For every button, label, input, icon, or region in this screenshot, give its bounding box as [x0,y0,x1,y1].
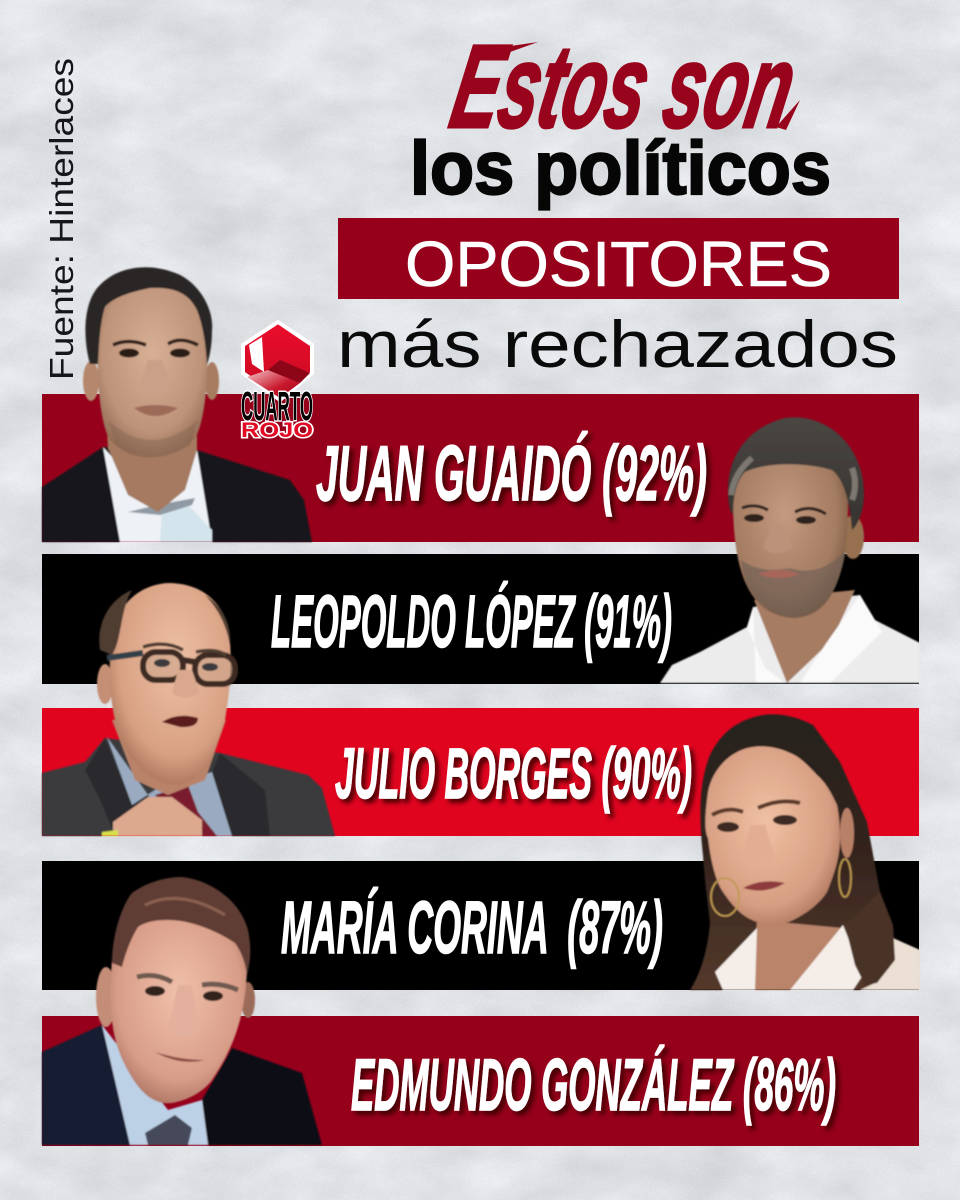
bar 5: Edmundo González [42,1016,919,1146]
portrait: Leopoldo López [660,417,920,683]
heading line: los políticos: los políticos [410,126,831,210]
bar 1: Juan Guaidó [42,394,919,542]
portrait: Juan Guaidó [42,267,312,542]
bar 4: María Corina [42,861,919,990]
heading line: más rechazados: más rechazados [337,307,898,381]
logo word: ROJO: ROJO [241,419,313,442]
infographic canvas: CUARTO [241,383,313,429]
banner: OPOSITORES: OPOSITORES [405,228,832,300]
portrait: Julio Borges [42,583,335,836]
icon: red hexagon room [243,322,312,400]
portrait: María Corina [690,714,920,990]
source credit: Fuente: Hinterlaces [43,58,80,380]
title [337,21,899,381]
banner: OPOSITORES [338,218,899,300]
logo: Cuarto Rojo [241,322,313,442]
portrait: Edmundo González [42,877,322,1145]
bar 2: Leopoldo López [42,554,919,684]
bar 3: Julio Borges [42,708,919,836]
